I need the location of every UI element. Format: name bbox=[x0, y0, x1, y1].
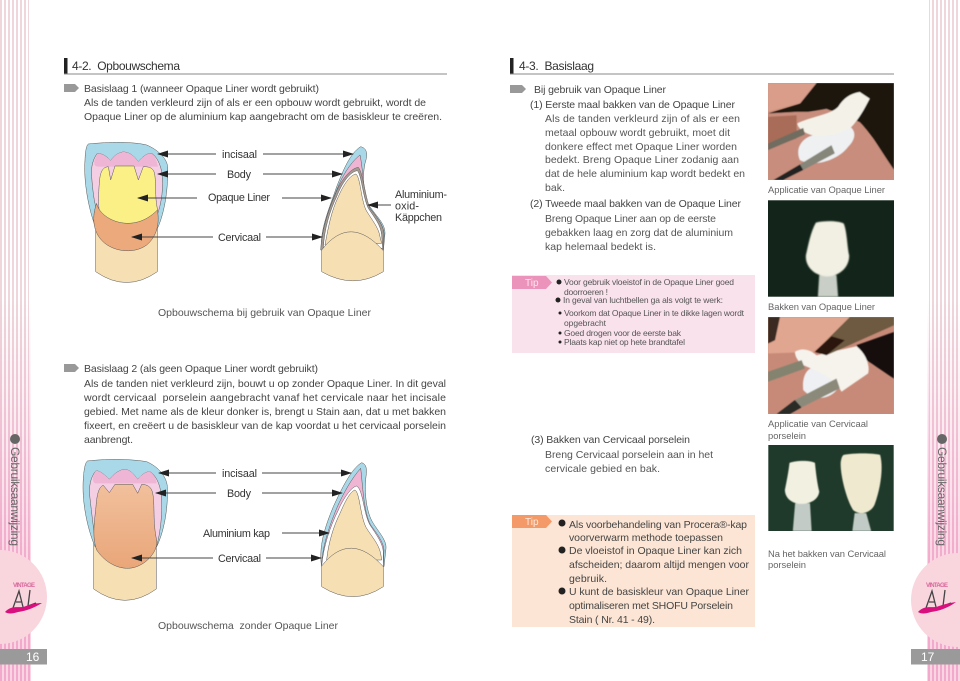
tip box: orange: voorverwarm methode toepassen bbox=[569, 532, 723, 544]
right decorative stripe column bbox=[927, 0, 960, 681]
left logo circle: VINTAGE bbox=[13, 583, 35, 589]
page number 16 bbox=[0, 649, 47, 664]
text block: Basislaag 2 bbox=[64, 363, 446, 446]
label: Aluminium-oxid-Käppchen: Käppchen bbox=[395, 212, 442, 224]
caption: na het bakken: porselein bbox=[768, 559, 806, 570]
left decorative stripe column bbox=[0, 0, 31, 681]
tip box: orange: Tip bbox=[525, 517, 539, 528]
heading 4-2: 4-2. Opbouwschema bbox=[72, 59, 180, 73]
tip box: pink: In geval van luchtbellen ga als volgt te werk: bbox=[563, 295, 723, 305]
tip box: orange: U kunt de basiskleur van Opaque Liner bbox=[569, 586, 750, 598]
text block: steps 1 and 2: (1) Eerste maal bakken van de Opaque Liner bbox=[530, 99, 736, 111]
left logo circle bbox=[0, 550, 47, 644]
text block: steps 1 and 2: Als de tanden verkleurd zijn of als er een bbox=[545, 113, 740, 125]
label: Aluminium kap: Aluminium kap bbox=[203, 528, 270, 540]
tip box: pink: Voor gebruik vloeistof in de Opaque Liner goed bbox=[564, 277, 734, 287]
label: Cervicaal: Cervicaal bbox=[218, 232, 261, 244]
right side label: Gebruiksaanwijzing bbox=[935, 447, 949, 546]
text block: step 3: cervicale gebied en bak. bbox=[545, 463, 660, 475]
tip box: orange: De vloeistof in Opaque Liner kan zich bbox=[569, 545, 742, 557]
text block: step 3 bbox=[531, 434, 713, 475]
text block: steps 1 and 2: bak. bbox=[545, 182, 565, 194]
page number 17: 17 bbox=[921, 650, 935, 664]
text block: Basislaag 2: fixeert, en creëert u de basiskleur van de kap voordat u het cervicaal porselein bbox=[84, 420, 446, 432]
photo: applicatie van Opaque Liner bbox=[768, 83, 894, 180]
tip box: pink: Plaats kap niet op hete brandtafel bbox=[564, 337, 685, 347]
text block: Basislaag 1 bbox=[64, 83, 442, 123]
label: Aluminium-oxid-Käppchen: Aluminium- bbox=[395, 189, 447, 201]
tip box: pink: opgebracht bbox=[564, 318, 607, 328]
diagram: opbouwschema zonder Opaque Liner bbox=[83, 459, 386, 600]
text block: Basislaag 2: aanbrengt. bbox=[84, 434, 133, 446]
arrows bbox=[132, 154, 391, 237]
page number 17 bbox=[911, 649, 960, 664]
caption: na het bakken bbox=[768, 548, 886, 570]
left side label: Gebruiksaanwijzing bbox=[8, 447, 22, 546]
tip box: orange: optimaliseren met SHOFU Porselein bbox=[569, 600, 733, 612]
right logo circle: VINTAGE bbox=[926, 583, 948, 589]
caption: applicatie Cervicaal: Applicatie van Cervicaal bbox=[768, 418, 868, 429]
text block: step 3: Breng Cervicaal porselein aan in het bbox=[545, 449, 713, 461]
text block: Basislaag 2: Basislaag 2 (als geen Opaque Liner wordt gebruikt) bbox=[84, 363, 318, 375]
label: Aluminium-oxid-Käppchen: oxid- bbox=[395, 200, 419, 212]
right logo circle bbox=[911, 553, 960, 647]
photo: bakken van Opaque Liner bbox=[768, 200, 894, 297]
heading 4-3: 4-3. Basislaag bbox=[519, 59, 594, 73]
front tooth with layers bbox=[85, 142, 168, 282]
caption: na het bakken: Na het bakken van Cervicaal bbox=[768, 548, 886, 559]
caption: zonder Opaque Liner: Opbouwschema zonder Opaque Liner bbox=[158, 620, 338, 632]
tip box: orange: Als voorbehandeling van Procera®-kap bbox=[569, 519, 747, 531]
text block: step 3: (3) Bakken van Cervicaal porselein bbox=[531, 434, 690, 446]
text block: Basislaag 1: Basislaag 1 (wanneer Opaque Liner wordt gebruikt) bbox=[84, 83, 319, 95]
tip box: pink bbox=[512, 275, 755, 353]
heading 4-3 bbox=[510, 58, 894, 74]
tip box: orange bbox=[512, 515, 755, 627]
caption: bij gebruik van Opaque Liner: Opbouwschema bij gebruik van Opaque Liner bbox=[158, 307, 372, 319]
tip box: orange: gebruik. bbox=[569, 573, 607, 585]
text block: steps 1 and 2: (2) Tweede maal bakken van de Opaque Liner bbox=[530, 198, 742, 210]
caption: applicatie Cervicaal: porselein bbox=[768, 430, 806, 441]
photo: applicatie van Cervicaal porselein bbox=[768, 317, 894, 414]
caption: bakken Opaque Liner: Bakken van Opaque Liner bbox=[768, 301, 875, 312]
diagram: opbouwschema met Opaque Liner bbox=[85, 142, 447, 282]
text block: Basislaag 2: Als de tanden niet verkleurd zijn, bouwt u op zonder Opaque Liner. In dit geval bbox=[84, 378, 446, 390]
text block: steps 1 and 2: gebakken laag en zorg dat de aluminium bbox=[545, 227, 733, 239]
tip box: pink: Voorkom dat Opaque Liner in te dikke lagen wordt bbox=[564, 308, 745, 318]
label: Aluminium-oxid-Käppchen bbox=[395, 189, 447, 224]
label: incisaal: incisaal bbox=[222, 149, 257, 161]
text block: Basislaag 2: gebied. Met name als de kleur donker is, brengt u Stain aan, dat u met bakken bbox=[84, 406, 446, 418]
label: Cervicaal: Cervicaal bbox=[218, 553, 261, 565]
page number 16: 16 bbox=[26, 650, 40, 664]
photo: na het bakken bbox=[768, 445, 894, 531]
arrows bbox=[132, 473, 351, 558]
text block: steps 1 and 2 bbox=[510, 84, 745, 253]
text block: Basislaag 1: Als de tanden verkleurd zijn of als er een opbouw wordt gebruikt, wordt de bbox=[84, 97, 426, 109]
label: Body: Body bbox=[227, 488, 252, 500]
text block: Basislaag 1: Opaque Liner op de aluminium kap aangebracht om de basiskleur te creëren. bbox=[84, 111, 442, 123]
caption: applicatie Cervicaal bbox=[768, 418, 868, 441]
text block: steps 1 and 2: metaal opbouw wordt gebruikt, moet dit bbox=[545, 127, 730, 139]
text block: steps 1 and 2: Bij gebruik van Opaque Liner bbox=[534, 84, 666, 96]
text block: steps 1 and 2: donkere effect met Opaque Liner worden bbox=[545, 141, 737, 153]
label: Opaque Liner: Opaque Liner bbox=[208, 192, 270, 204]
tip box: orange: afscheiden; daarom altijd mengen voor bbox=[569, 559, 750, 571]
text block: steps 1 and 2: kap helemaal bedekt is. bbox=[545, 241, 656, 253]
front tooth without liner bbox=[83, 459, 167, 600]
tip box: pink: doorroeren ! bbox=[564, 287, 608, 297]
text block: steps 1 and 2: bedekt. Breng Opaque Liner zodanig aan bbox=[545, 154, 739, 166]
caption: applicatie Opaque Liner: Applicatie van Opaque Liner bbox=[768, 184, 885, 195]
tip box: pink: Tip bbox=[525, 278, 539, 289]
side tooth without liner bbox=[321, 463, 386, 597]
heading 4-2 bbox=[64, 58, 447, 74]
tip box: orange: Stain ( Nr. 41 - 49). bbox=[569, 614, 655, 626]
label: Body: Body bbox=[227, 169, 252, 181]
text block: steps 1 and 2: dat de hele aluminium kap wordt bedekt en bbox=[545, 168, 745, 180]
label: incisaal: incisaal bbox=[222, 468, 257, 480]
tip box: pink: Goed drogen voor de eerste bak bbox=[564, 328, 682, 338]
text block: steps 1 and 2: Breng Opaque Liner aan op de eerste bbox=[545, 213, 716, 225]
side tooth with layers bbox=[321, 147, 385, 281]
text block: Basislaag 2: wordt cervicaal porselein aangebracht vanaf het cervicale naar het incisale bbox=[83, 392, 446, 404]
